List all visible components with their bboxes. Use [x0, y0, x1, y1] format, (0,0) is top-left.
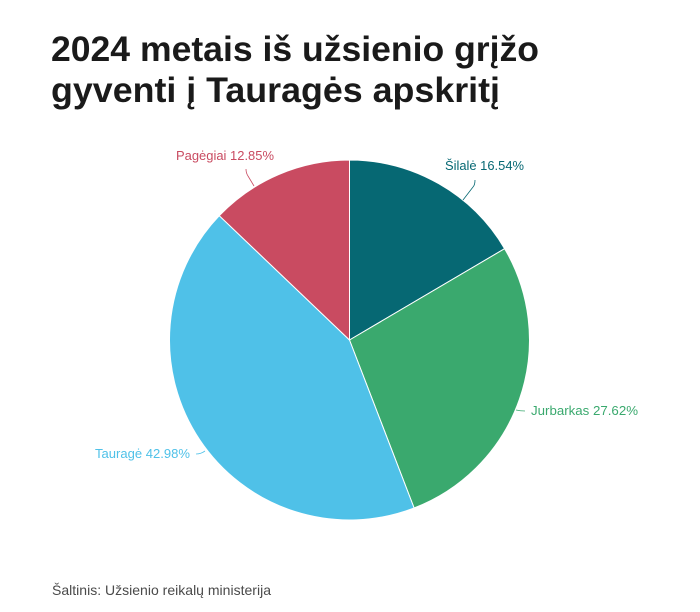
source note: Šaltinis: Užsienio reikalų ministerija	[52, 582, 271, 598]
slice: Jurbarkas	[350, 249, 529, 508]
slice: Pagėgiai	[219, 160, 350, 340]
title: gyventi į Tauragės apskritį	[51, 71, 500, 110]
label: Pagėgiai 12.85%	[176, 148, 274, 186]
pie chart	[169, 160, 529, 520]
label: Jurbarkas 27.62%: Jurbarkas 27.62%	[531, 403, 638, 418]
label: Šilalė 16.54%	[445, 158, 524, 200]
label: Tauragė 42.98%: Tauragė 42.98%	[95, 446, 190, 461]
label: Šilalė 16.54%: Šilalė 16.54%	[445, 158, 524, 173]
slice: Šilalė	[350, 160, 505, 340]
label: Pagėgiai 12.85%: Pagėgiai 12.85%	[176, 148, 274, 163]
title	[51, 30, 539, 110]
title: 2024 metais iš užsienio grįžo	[51, 30, 539, 69]
slice: Tauragė	[169, 216, 414, 520]
